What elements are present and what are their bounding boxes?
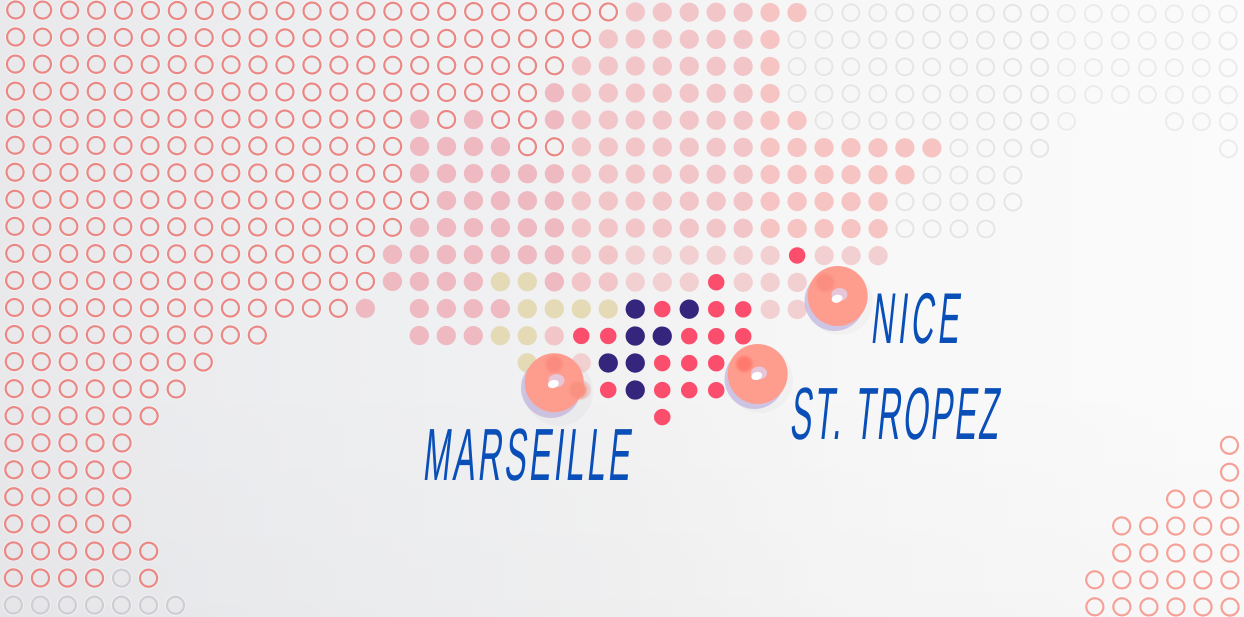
label: Nice: NICE	[868, 277, 965, 358]
pin: Marseille acrylic disc	[521, 353, 593, 426]
pin: Nice acrylic disc	[804, 266, 873, 335]
yellow filled dots	[500, 282, 609, 363]
magenta filled dots	[581, 255, 797, 417]
navy filled dots	[608, 309, 689, 390]
pin: St. Tropez acrylic disc	[724, 344, 793, 413]
pink filled dots: land area	[365, 12, 932, 390]
label: St. Tropez: ST. TROPEZ	[787, 373, 1004, 456]
label: Marseille: MARSEILLE	[420, 414, 636, 497]
